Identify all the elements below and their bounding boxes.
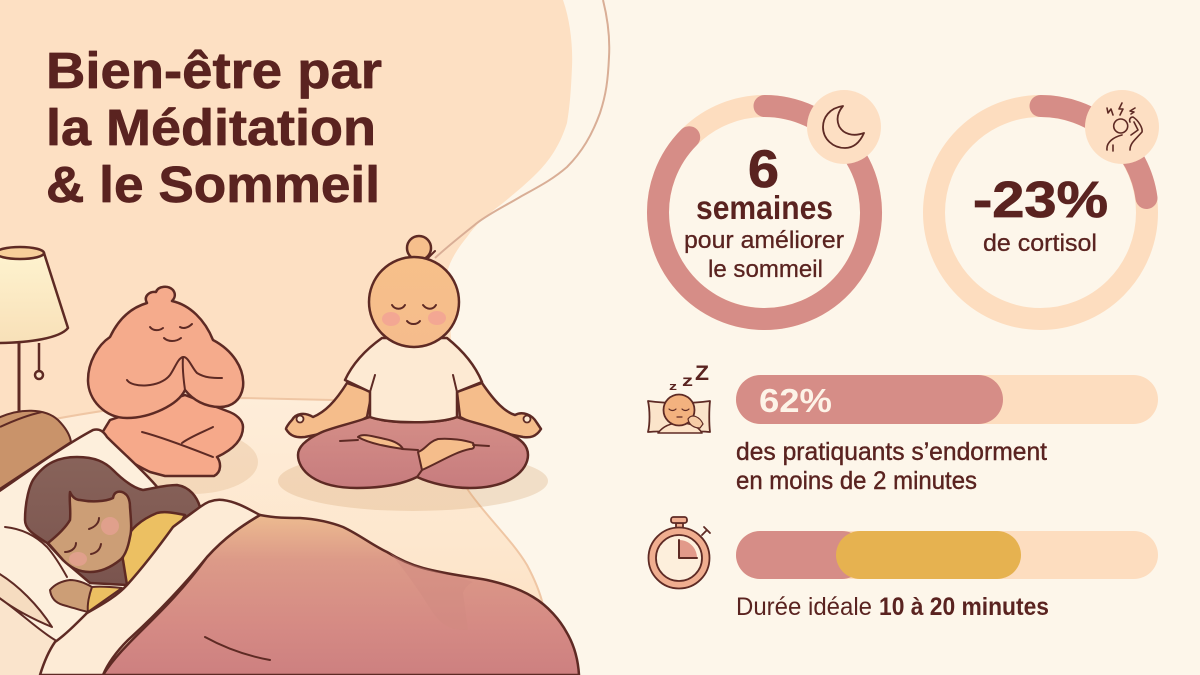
illustration: pink meditating figure [88,287,243,476]
illustration: lamp [0,247,68,412]
icon: moon [807,90,881,164]
trousers [298,417,528,488]
hair [25,457,200,585]
bun [407,236,435,260]
right arm [457,383,541,437]
text: ideal duration [736,593,1049,621]
feet [340,435,489,477]
title [46,42,382,213]
face [48,492,131,572]
left arm [286,383,372,437]
text: sleep stat [736,438,1047,495]
illustration: sleeping woman [0,429,200,675]
front pillow [0,527,87,675]
stat: 6 semaines: 6 [748,140,779,199]
text: sleep stat: des pratiquants s’endorment [736,438,1047,466]
title: Bien-être par [46,42,382,99]
donut chart: 6 semaines [658,106,871,319]
floor [0,398,560,675]
hand and sleeve [50,580,92,612]
text: ideal duration: 10 à 20 minutes [879,593,1049,621]
range bar: ideal duration [736,531,1158,579]
icon: sleeping head on pillow: z [669,381,678,393]
stat: cortisol: de cortisol [983,230,1097,257]
yellow shirt [123,512,185,585]
stat: 6 semaines: semaines [696,189,833,226]
illustration: blanket [40,500,579,675]
icon: sleeping head on pillow: z [682,373,693,390]
shirt [345,338,482,422]
title: & le Sommeil [46,156,380,213]
stat: cortisol: -23% [973,171,1108,228]
illustration: central meditating figure [286,236,541,488]
icon: sleeping head on pillow: Z [695,362,709,385]
finger rings [296,416,530,422]
thin flowing line [435,0,609,258]
pink duvet [103,515,579,675]
duvet fold [390,553,473,630]
text: sleep stat: en moins de 2 minutes [736,467,977,495]
icon: stopwatch [648,517,710,588]
head [369,257,459,347]
face details [65,517,119,566]
donut chart: cortisol [934,106,1147,319]
pillow [0,429,200,640]
stat: 6 semaines [684,140,844,283]
illustration: headboard [0,411,71,490]
stat: cortisol [973,171,1108,257]
progress bar: 62% [736,375,1158,424]
icon: sleeping head on pillow [648,362,710,433]
stat: 6 semaines: pour améliorer [684,227,844,254]
face [382,305,446,326]
title: la Méditation [46,99,376,156]
icon: stress [1085,90,1159,164]
illustration: pink figure floor shadow [126,430,258,494]
illustration: floor shadow [278,451,548,511]
text: ideal duration: Durée idéale [736,593,872,621]
peach background blob [0,0,572,675]
progress bar: 62%: 62% [759,382,832,419]
cream fold [40,500,260,675]
stat: 6 semaines: le sommeil [708,256,823,283]
